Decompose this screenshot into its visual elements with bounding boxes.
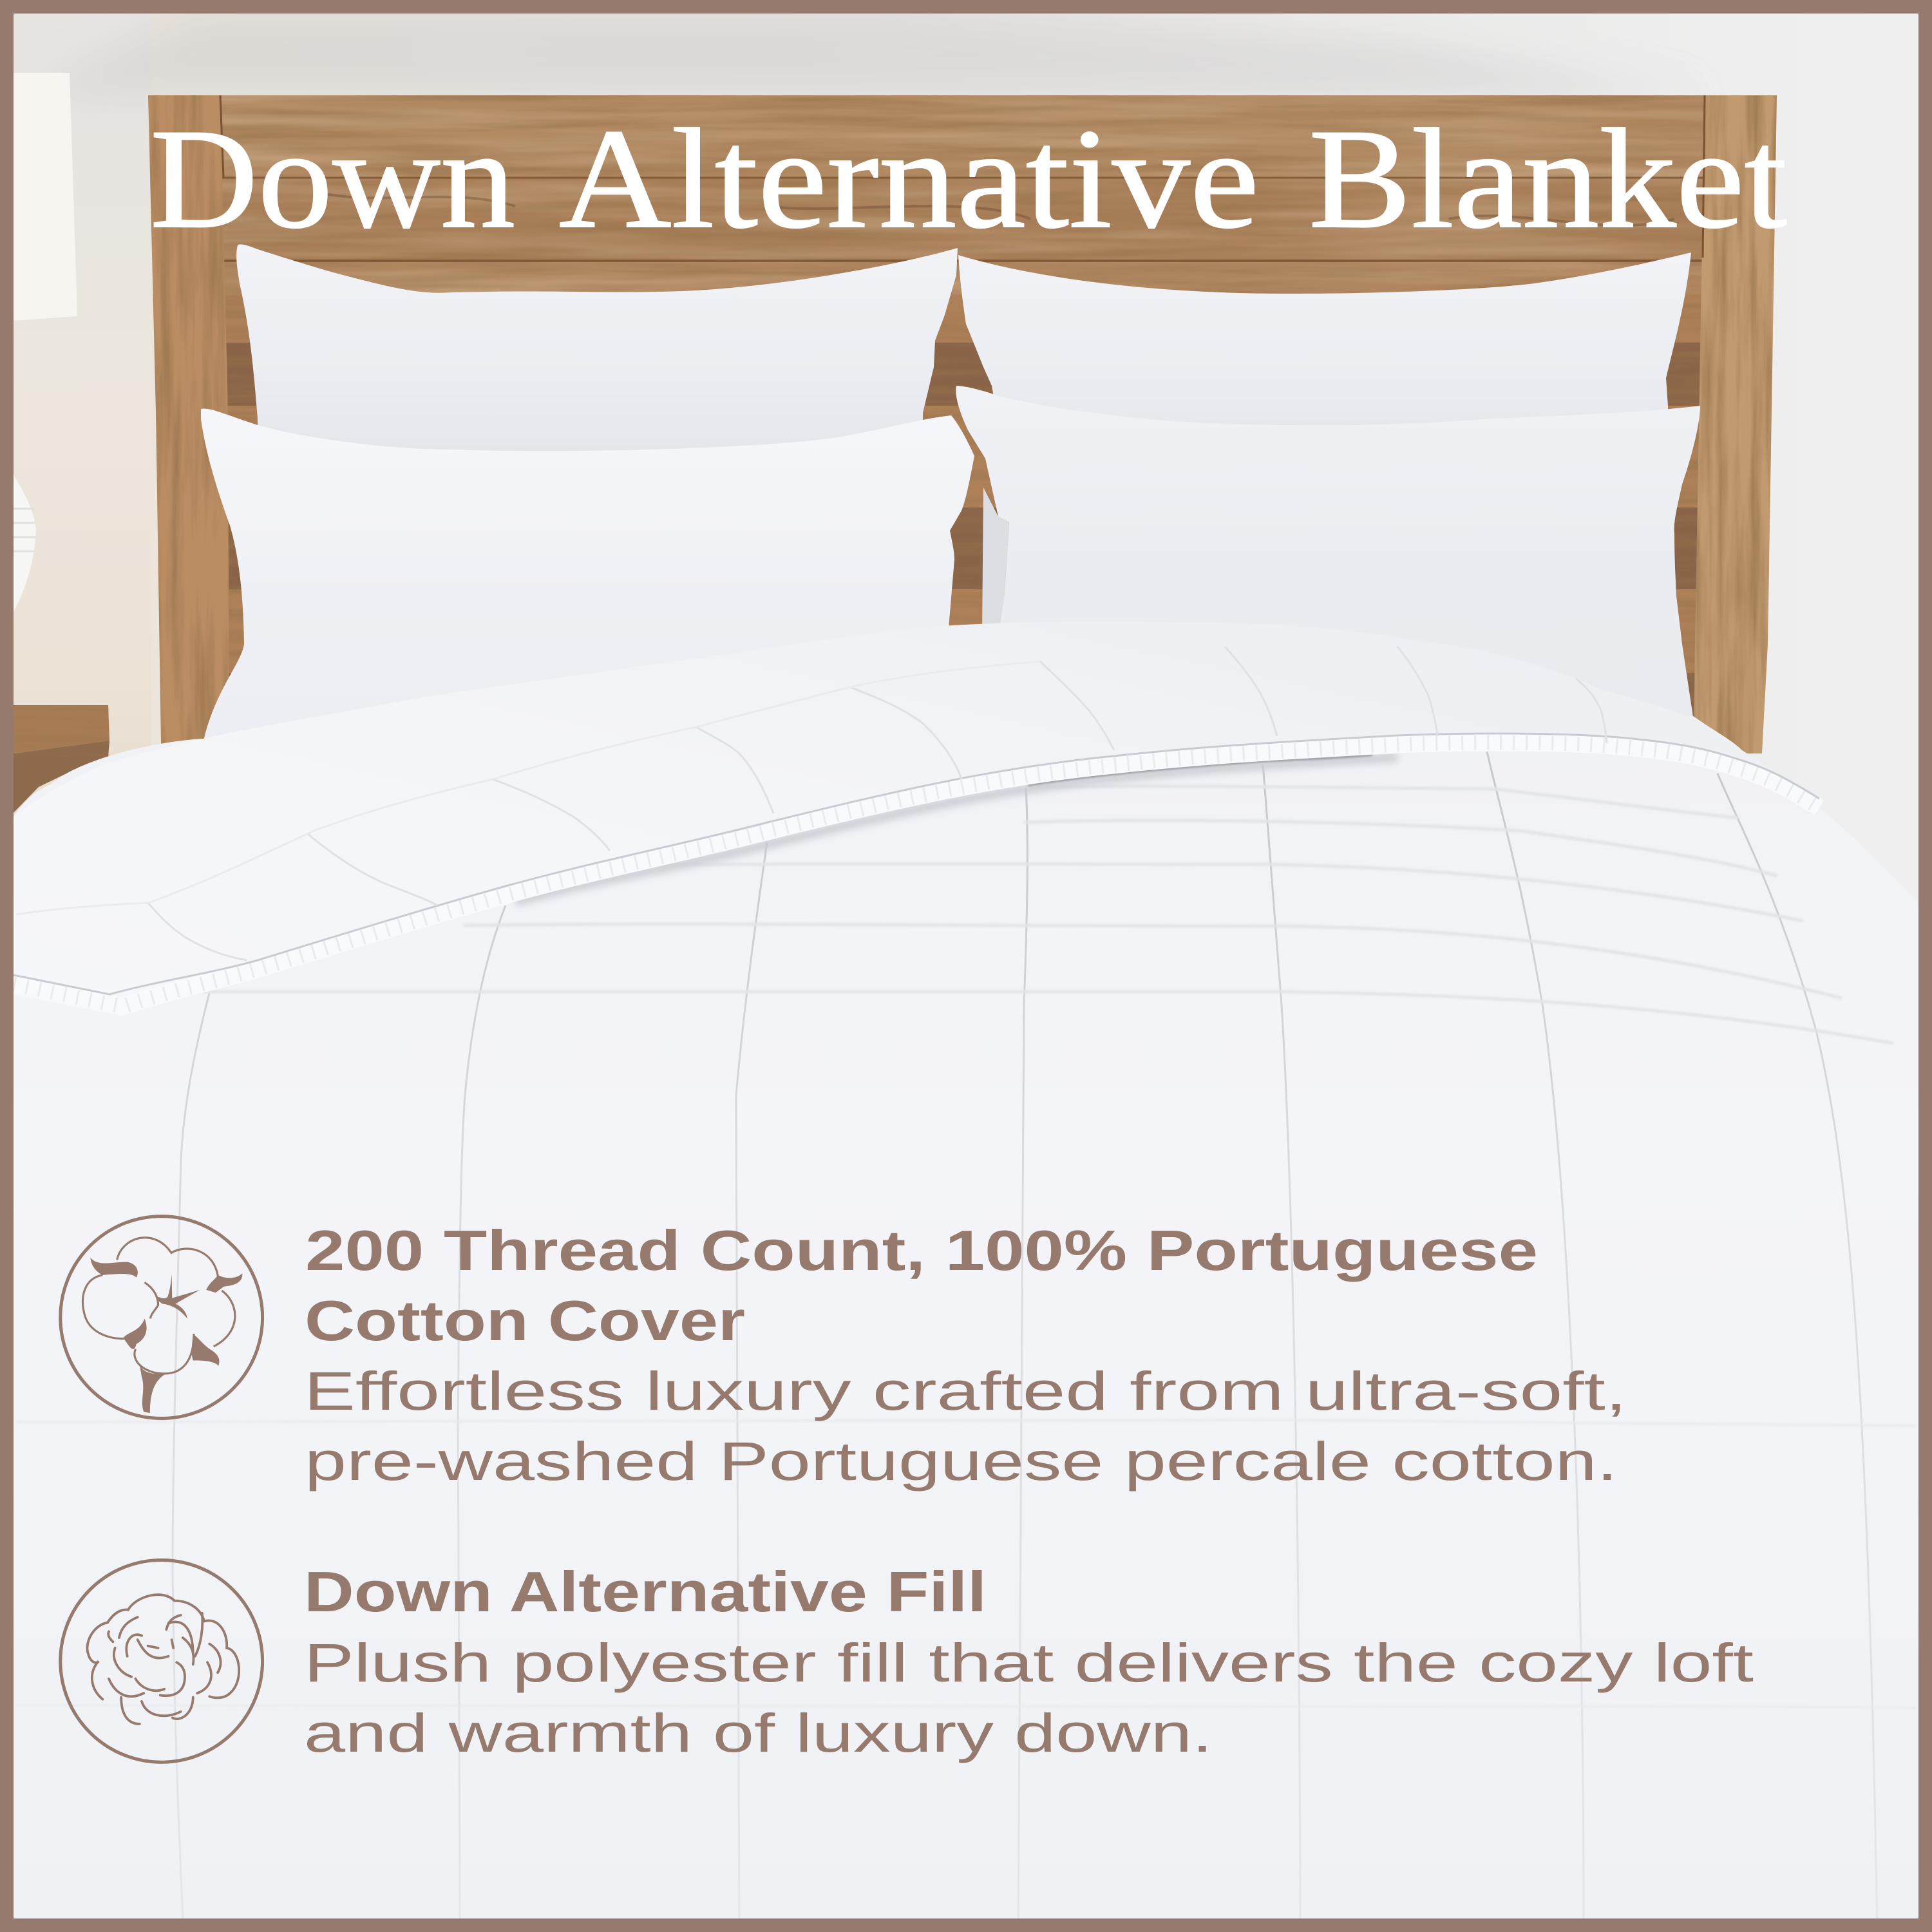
hem band [14,743,1819,1007]
lamp shade [14,73,77,321]
inner pillow opening [982,488,1009,634]
middle board [222,178,1703,261]
description: pre-washed Portuguese percale cotton. [305,1431,1618,1492]
back right pillow [958,252,1691,457]
wall background [0,0,1932,966]
title: Down [150,100,515,258]
top board [219,95,1707,178]
text block: down alternative fill [304,1560,1754,1763]
hem ruffles [14,743,1819,1007]
nightstand [14,705,109,813]
pillows [201,244,1700,741]
horizontal quilt seams [16,786,1916,1708]
description: and warmth of luxury down. [304,1703,1213,1763]
icon ring [61,1217,263,1418]
table lamp [14,73,77,612]
headboard [148,95,1777,753]
description: Plush polyester fill that delivers the cozy loft [304,1633,1754,1693]
puff outline and inner curls [87,1595,239,1724]
boll outlines [82,1238,235,1374]
icon: cotton boll in circle [61,1217,263,1418]
right post [1694,95,1777,753]
icon ring [61,1560,263,1762]
wood grain overlay [219,95,1707,746]
icon: polyester fill puff in circle [61,1560,263,1762]
front right pillow [956,386,1700,721]
title: Blanket [1309,100,1787,258]
text block: cotton cover [304,1218,1627,1492]
leaves and stem [90,1258,242,1413]
title: Alternative [559,100,1259,258]
dark backing between slats [225,261,1703,747]
heading: Cotton Cover [305,1289,745,1352]
third board [222,261,1703,295]
blanket folded-over top layer [14,621,1819,1016]
shadow under fold hem [515,757,1397,902]
heading: 200 Thread Count, 100% Portuguese [305,1218,1538,1282]
vertical quilt seams [173,752,1877,1932]
description [304,1633,1754,1763]
back left pillow [236,244,958,464]
left post [148,95,229,744]
description [304,1361,1627,1492]
post grain [148,95,229,744]
heading [305,1218,1538,1352]
heading: Down Alternative Fill [304,1560,987,1624]
slats [224,261,1702,673]
description: Effortless luxury crafted from ultra-soft, [304,1361,1627,1421]
fold quilt seams [16,647,1607,960]
blanket main body [14,716,1919,1932]
hem top stitch [14,734,1819,994]
front left pillow [201,408,974,741]
lamp base [14,475,36,612]
